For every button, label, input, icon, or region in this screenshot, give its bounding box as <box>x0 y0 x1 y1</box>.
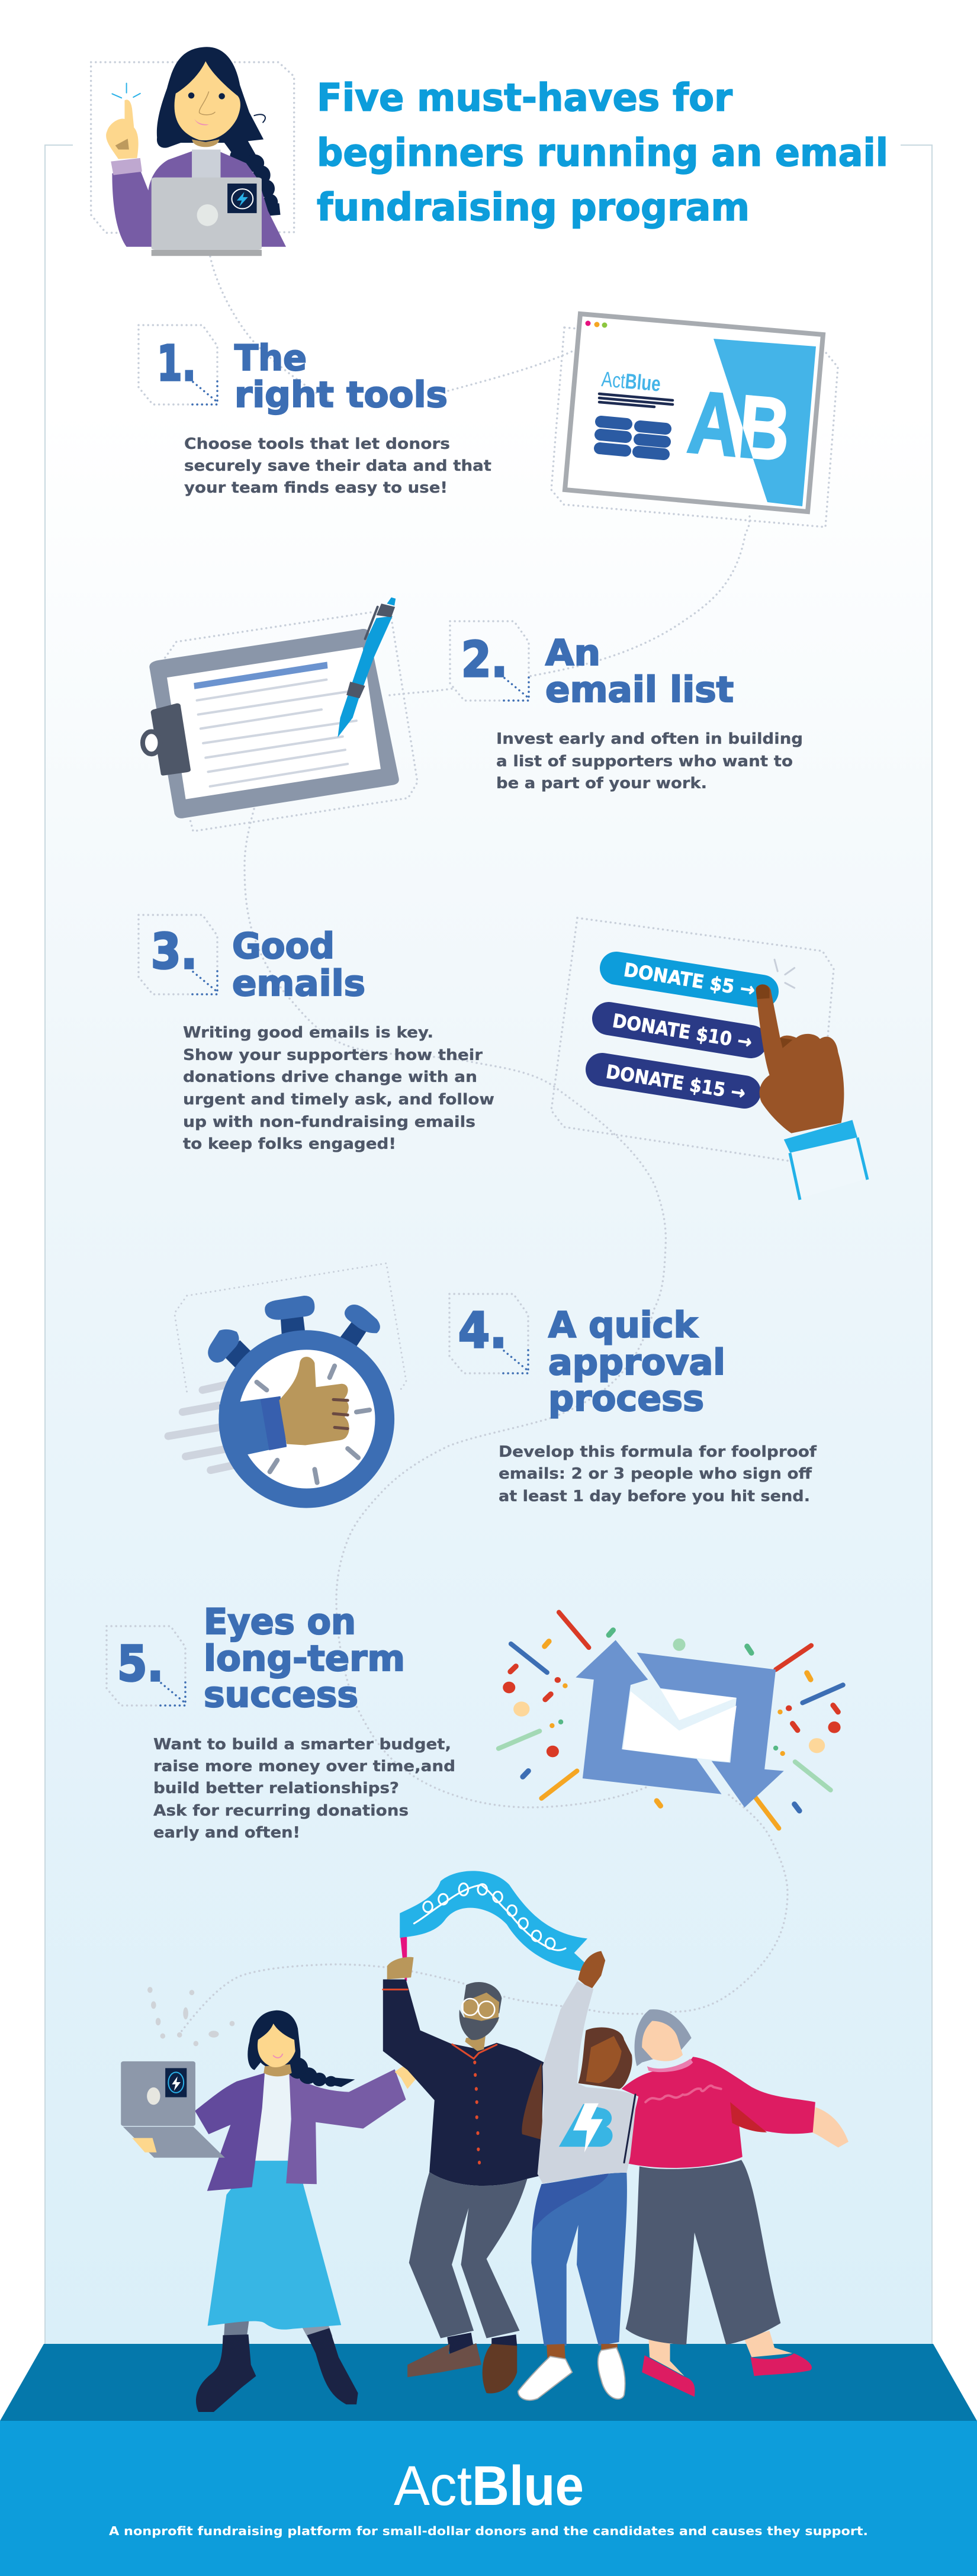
step 5 text: raise more money over time,and <box>153 1758 455 1775</box>
step 4 badge <box>449 1294 528 1373</box>
step 3 text: donations drive change with an <box>183 1068 477 1086</box>
step 5 text: build better relationships? <box>153 1780 399 1797</box>
floor <box>0 2344 977 2421</box>
icon: donate buttons and pointing hand: DONATE $10 → <box>611 1009 754 1053</box>
step 5 heading: Eyes on <box>204 1601 356 1643</box>
back wall frame <box>45 139 932 2344</box>
step 4 heading: A quick <box>548 1305 699 1346</box>
step 2 text <box>496 730 803 792</box>
icon: donate buttons and pointing hand: DONATE $15 → <box>605 1060 747 1104</box>
step 3 heading: emails <box>232 963 365 1004</box>
person: woman with laptop <box>121 2010 423 2412</box>
step 3 text: Show your supporters how their <box>183 1046 483 1064</box>
title: beginners running an email <box>317 131 888 175</box>
step 5 text <box>153 1736 455 1842</box>
icon: donate buttons and pointing hand <box>551 918 868 1200</box>
step 3 heading <box>232 926 365 1004</box>
icon: browser window with ActBlue page: ActBlue <box>600 367 661 396</box>
ActBlue logo <box>394 2455 584 2517</box>
step 1 badge: 1. <box>157 336 196 392</box>
title: Five must-haves for <box>317 76 732 120</box>
icon: browser window with ActBlue page: AB <box>684 372 794 480</box>
footer tagline: A nonprofit fundraising platform for small-dollar donors and the candidates and causes they support. <box>109 2524 868 2538</box>
step 3 text: Writing good emails is key. <box>183 1024 433 1042</box>
step 1 text <box>184 435 491 497</box>
step 3 text: urgent and timely ask, and follow <box>183 1091 494 1109</box>
step 5 heading: success <box>204 1674 358 1716</box>
step 4 text: emails: 2 or 3 people who sign off <box>499 1465 812 1483</box>
step 2 badge: 2. <box>461 632 507 688</box>
person: man raising flag <box>383 1957 544 2394</box>
step 1 heading: The <box>234 338 307 379</box>
step 5 text: Ask for recurring donations <box>153 1802 409 1820</box>
dotted connector paths <box>147 256 788 2046</box>
step 2 text: be a part of your work. <box>496 775 707 792</box>
step 1 badge <box>139 325 217 404</box>
step 1 heading: right tools <box>234 374 448 416</box>
icon: envelope with arrows and confetti <box>499 1613 843 1828</box>
step 4 text: at least 1 day before you hit send. <box>499 1488 810 1505</box>
step 4 text: Develop this formula for foolproof <box>499 1443 817 1461</box>
title <box>317 76 888 230</box>
icon: woman pointing with laptop <box>91 47 294 256</box>
step 5 text: early and often! <box>153 1824 300 1842</box>
icon: donate buttons and pointing hand: DONATE $5 → <box>622 958 757 1001</box>
step 3 badge <box>139 915 217 994</box>
step 5 badge <box>107 1626 185 1705</box>
person: woman in pink sweater <box>622 2009 849 2397</box>
icon: clipboard and pen <box>143 598 417 831</box>
step 2 heading: email list <box>545 669 734 711</box>
person: woman with ActBlue sweatshirt <box>518 1951 637 2400</box>
step 5 text: Want to build a smarter budget, <box>153 1736 451 1753</box>
step 5 badge: 5. <box>117 1636 163 1692</box>
step 4 heading: process <box>548 1378 704 1419</box>
icon: browser window with ActBlue page: AB <box>684 372 794 480</box>
step 2 heading: An <box>545 632 600 674</box>
step 1 heading <box>234 338 448 416</box>
icon: stopwatch with thumbs up <box>168 1263 406 1508</box>
step 1 text: Choose tools that let donors <box>184 435 450 453</box>
ActBlue logo: Blue <box>472 2455 584 2517</box>
group of four people with flag <box>121 1871 849 2412</box>
step 3 heading: Good <box>232 926 335 967</box>
step 2 badge <box>450 621 529 701</box>
step 2 text: Invest early and often in building <box>496 730 803 748</box>
icon: flag <box>400 1871 587 1981</box>
step 3 text <box>183 1024 494 1153</box>
step 3 text: to keep folks engaged! <box>183 1135 396 1153</box>
step 3 badge: 3. <box>151 924 197 980</box>
step 2 text: a list of supporters who want to <box>496 753 793 770</box>
step 4 badge: 4. <box>458 1303 507 1359</box>
title: fundraising program <box>317 186 750 230</box>
icon: browser window with ActBlue page <box>551 314 838 527</box>
step 3 text: up with non-fundraising emails <box>183 1113 475 1131</box>
step 1 text: your team finds easy to use! <box>184 479 448 497</box>
front band <box>0 2421 977 2576</box>
ActBlue logo: Act <box>394 2455 472 2517</box>
step 4 heading: approval <box>548 1342 725 1383</box>
step 5 heading: long-term <box>204 1638 405 1679</box>
step 4 heading <box>548 1305 725 1419</box>
step 4 text <box>499 1443 817 1505</box>
step 5 heading <box>204 1601 405 1716</box>
step 1 text: securely save their data and that <box>184 457 491 475</box>
step 2 heading <box>545 632 734 711</box>
